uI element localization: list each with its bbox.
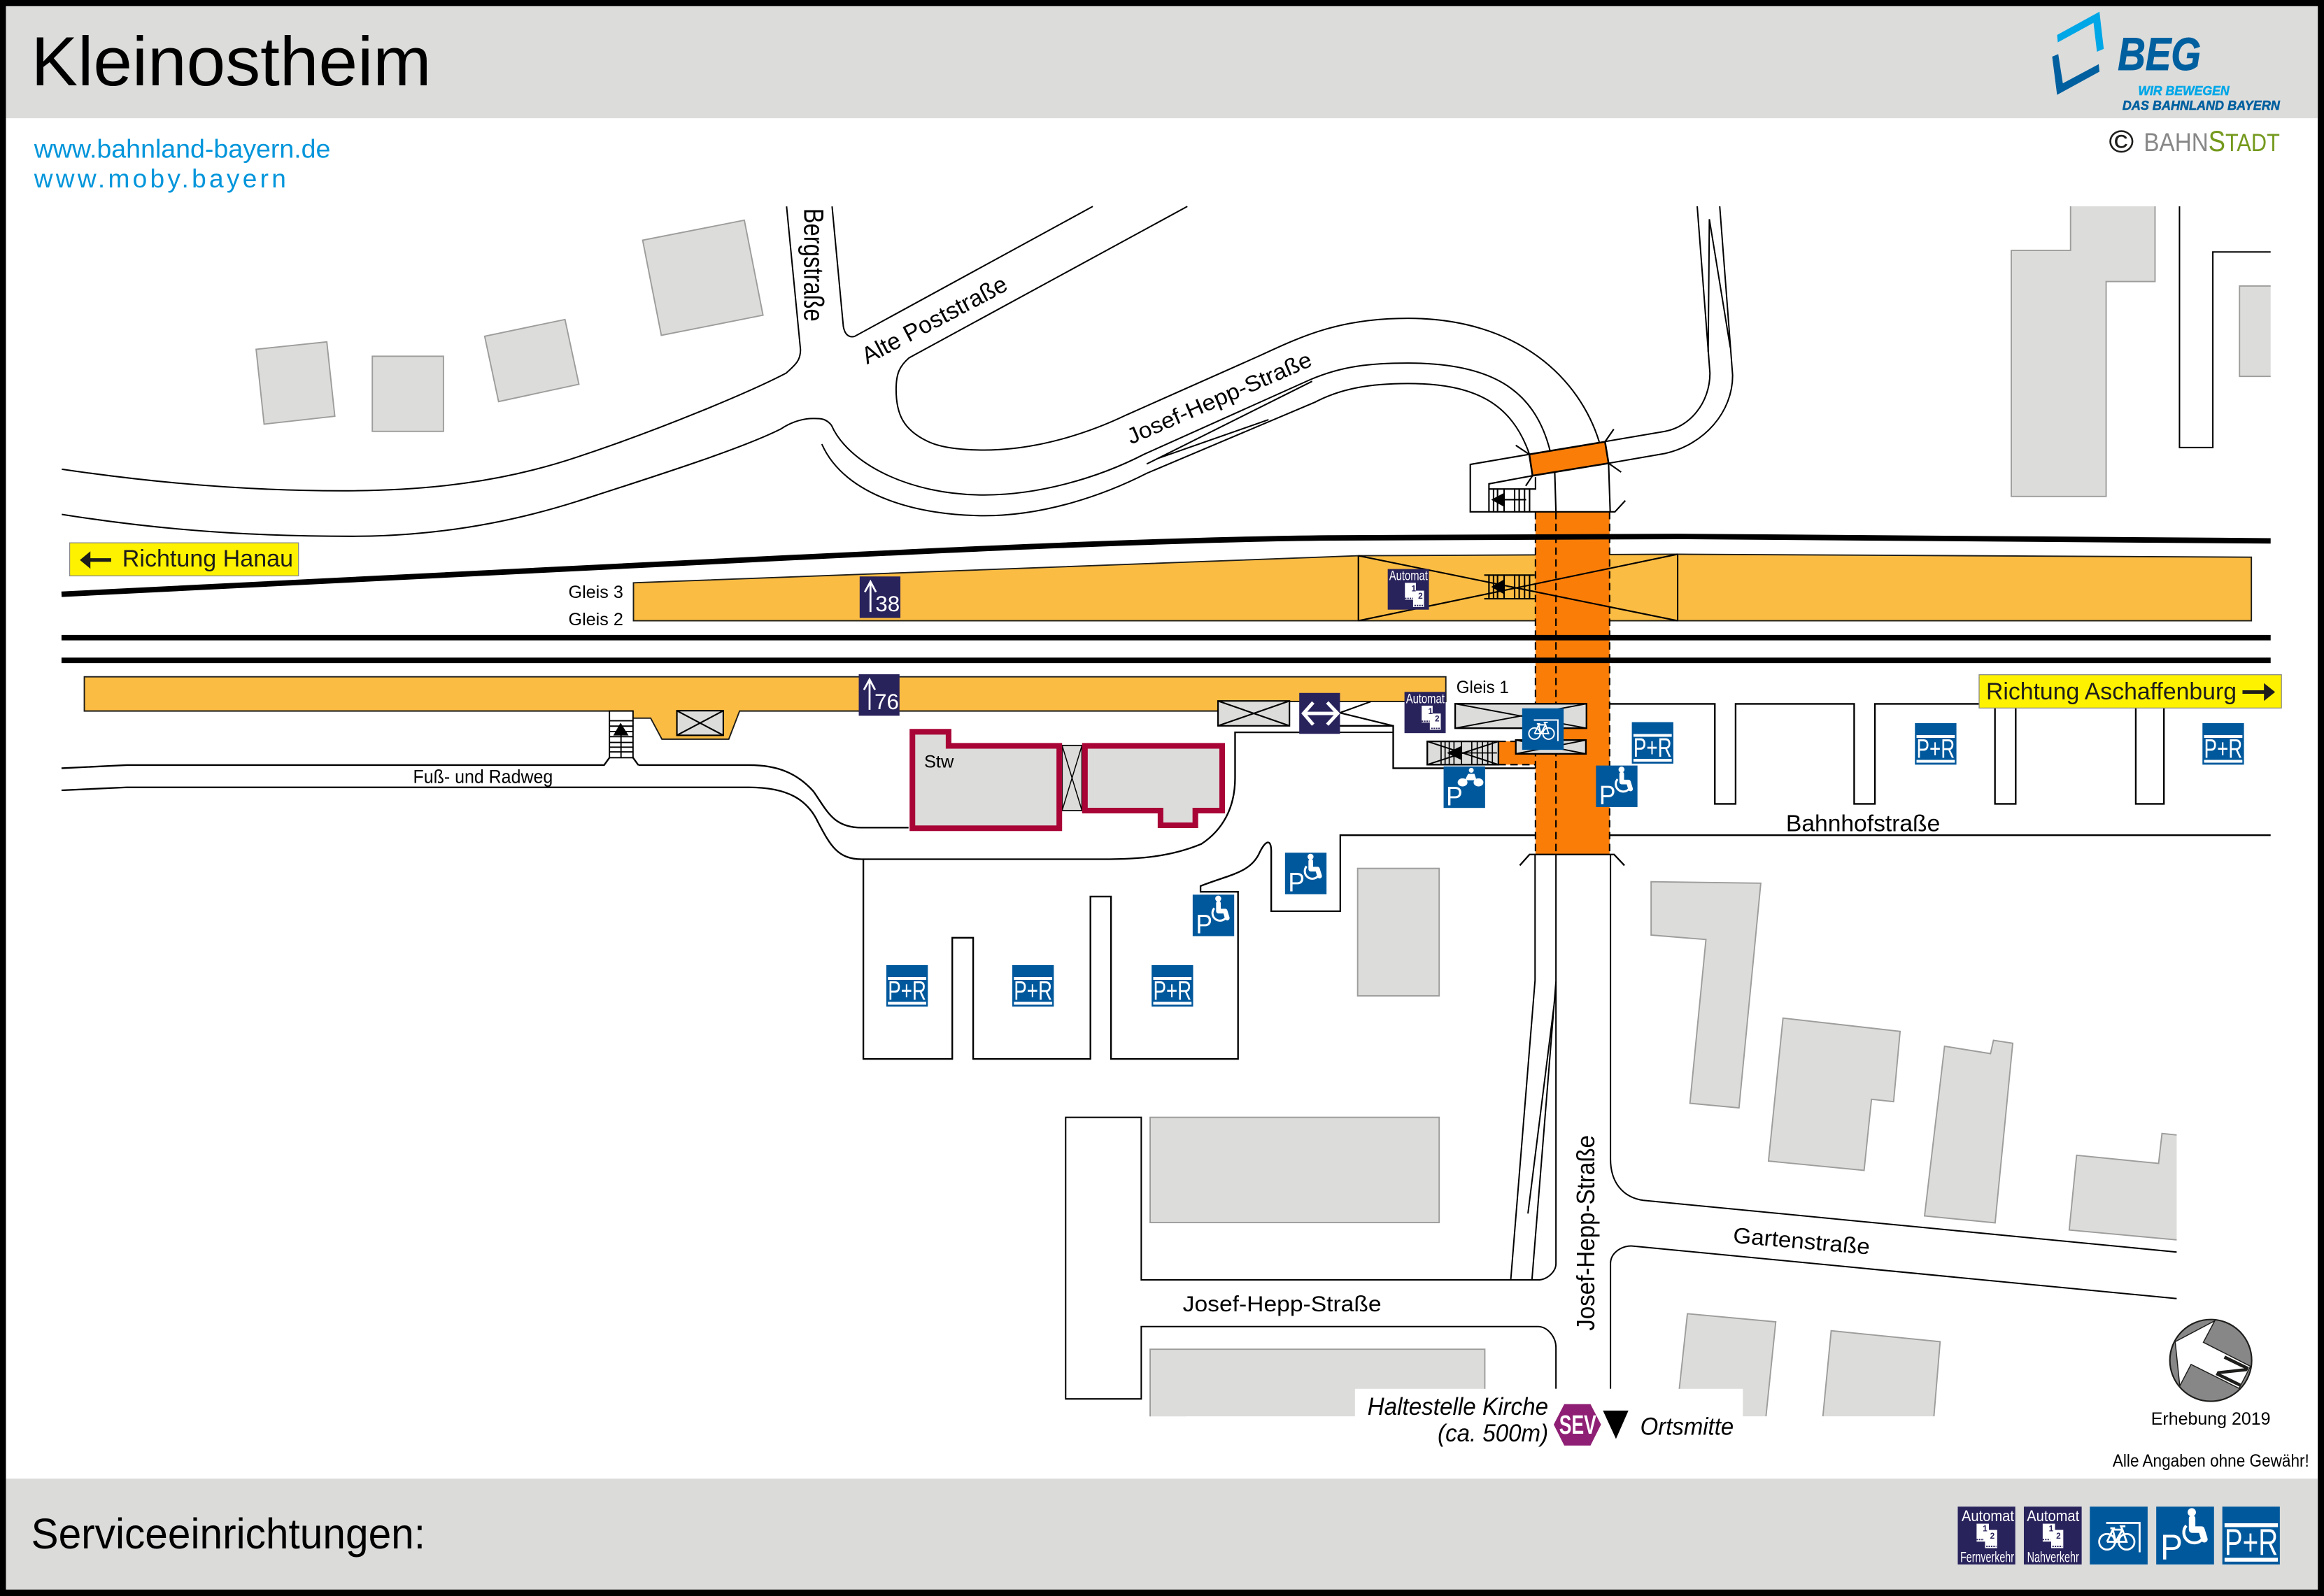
logo: BEG: [2052, 12, 2280, 113]
platform labels: Gleis 2: [568, 610, 623, 629]
website links: www.bahnland-bayern.de: [34, 134, 330, 164]
legend: Automat Fernverkehr: 2: [1990, 1531, 1995, 1541]
signal box: Stw: [912, 732, 1222, 828]
stairs: Gleis 2/3: [1485, 575, 1535, 599]
platform labels: [568, 583, 1509, 697]
copyright: BahnStadt: ©: [2109, 124, 2134, 159]
legend: Automat Nahverkehr: 2: [2056, 1531, 2061, 1541]
callout: Ortsmitte: Ortsmitte: [1641, 1413, 1734, 1440]
icon: ticket machine Gleis 2/3: 1: [1412, 583, 1417, 593]
shelter: Gleis 1: [1218, 701, 1394, 726]
icon: park and ride 1: P+R: [1634, 734, 1672, 763]
icon: platform length 76: 76: [874, 690, 899, 714]
direction sign: Hanau: Richtung Hanau: [122, 546, 293, 572]
icon: park and ride 1: [1632, 722, 1673, 764]
platform: Gleis 2/3: [633, 554, 2251, 621]
icon: accessible parking west: P: [1196, 911, 1212, 940]
legend: accessible parking: P: [2160, 1527, 2183, 1567]
road label: Bergstrasse: Bergstraße: [798, 208, 829, 322]
road label: Bahnhofstrasse: Bahnhofstraße: [1786, 811, 1940, 837]
legend: park and ride: P+R: [2225, 1522, 2278, 1563]
copyright: BahnStadt: BAHN: [2144, 127, 2209, 157]
legend: park and ride: [2223, 1506, 2280, 1565]
elevator and stairs area: Gleis 1 east: [1427, 704, 1587, 764]
icon: park and ride 2: P+R: [1917, 734, 1955, 764]
icon: platform length 38: 38: [875, 592, 900, 616]
footer heading: Serviceeinrichtungen:: [31, 1510, 425, 1558]
callout: SEV stop: [1368, 1393, 1601, 1447]
icon: park and ride 5: [1012, 965, 1054, 1006]
icon: park and ride 5: P+R: [1014, 976, 1052, 1006]
icon: accessible parking west: [1193, 895, 1234, 940]
icon: ticket machine Gleis 1: Automat: [1406, 692, 1445, 706]
roads: [62, 206, 2271, 1399]
direction sign: Hanau: [70, 543, 299, 576]
callout: SEV stop: (ca. 500m): [1438, 1420, 1548, 1447]
road label: Alte Poststrasse: Alte Poststraße: [857, 271, 1012, 369]
title: Kleinostheim: [31, 23, 432, 101]
icon: motorcycle parking: [1444, 767, 1485, 811]
icon: accessible parking at underpass: P: [1599, 781, 1615, 811]
legend: Automat Fernverkehr: Automat: [1962, 1507, 2015, 1525]
callout: SEV stop: SEV: [1559, 1410, 1596, 1440]
stairs: Fussweg: [609, 711, 633, 757]
copyright: BahnStadt: STADT: [2209, 125, 2280, 157]
website links: [34, 134, 330, 193]
legend: Automat Nahverkehr: Automat: [2027, 1507, 2080, 1525]
road label: Josef-Hepp-Strasse south: Josef-Hepp-Straße: [1183, 1291, 1382, 1316]
icon: bike parking: [1522, 708, 1564, 750]
icon: park and ride 6: P+R: [1153, 976, 1191, 1006]
icon: park and ride 4: [886, 965, 928, 1006]
road label: Gartenstrasse: Gartenstraße: [1732, 1223, 1871, 1260]
icon: platform length 38: [860, 576, 900, 618]
footer band: [6, 1479, 2318, 1590]
underpass dashed edges: [1498, 512, 1610, 855]
path label: Fuss- und Radweg: Fuß- und Radweg: [413, 766, 553, 787]
icon: park and ride 3: [2202, 723, 2244, 764]
icon: park and ride 3: P+R: [2204, 734, 2242, 764]
legend: accessible parking: [2156, 1506, 2214, 1567]
icon: ticket machine Gleis 1: [1405, 692, 1446, 733]
road label: Josef-Hepp-Strasse vertical: Josef-Hepp-Straße: [1571, 1135, 1600, 1331]
icon: accessible parking north: P: [1288, 869, 1305, 898]
icon: ticket machine Gleis 2/3: [1388, 569, 1429, 610]
platform labels: Gleis 1: [1457, 678, 1509, 697]
signal box: Stw: Stw: [924, 752, 954, 771]
platform: Gleis 1: [85, 677, 1446, 739]
website links: www.moby.bayern: [34, 164, 286, 193]
copyright: BahnStadt: [2109, 124, 2280, 159]
tracks: [62, 536, 2271, 660]
platform labels: Gleis 3: [568, 583, 623, 602]
bridge outline and stairs: [1471, 429, 1625, 512]
logo: BEG: WIR BEWEGEN: [2138, 83, 2230, 98]
callout: Ortsmitte: [1603, 1411, 1734, 1440]
legend: Automat Nahverkehr: [2024, 1506, 2082, 1565]
bridge deck: [1529, 442, 1608, 476]
icon: motorcycle parking: P: [1446, 782, 1463, 811]
icon: ticket machine Gleis 2/3: Automat: [1389, 569, 1428, 584]
legend: Automat Fernverkehr: Fernverkehr: [1960, 1549, 2014, 1565]
icon: ticket machine Gleis 1: 2: [1435, 714, 1440, 724]
north arrow: [2170, 1320, 2258, 1402]
icon: accessible parking north: [1285, 853, 1326, 898]
direction sign: Aschaffenburg: Richtung Aschaffenburg: [1986, 678, 2237, 705]
underpass south flares: [1519, 855, 1624, 865]
platform shelter: Gleis 2/3: [1359, 554, 1678, 621]
legend: Automat Fernverkehr: [1957, 1506, 2015, 1565]
header band: [6, 6, 2318, 118]
icon: platform transfer arrows: [1299, 693, 1340, 734]
white label backing: [1186, 1389, 1957, 1476]
icon: accessible parking at underpass: [1596, 766, 1638, 811]
road label: Josef-Hepp-Strasse north: Josef-Hepp-Straße: [1123, 347, 1315, 449]
logo: BEG: BEG: [2118, 29, 2201, 80]
callout: SEV stop: Haltestelle Kirche: [1368, 1393, 1548, 1420]
legend: Automat Nahverkehr: 1: [2049, 1524, 2054, 1534]
legend: Automat Fernverkehr: 1: [1983, 1524, 1988, 1534]
underpass: [1498, 512, 1610, 855]
logo: BEG: DAS BAHNLAND BAYERN: [2123, 98, 2280, 113]
survey year: Erhebung 2019: [2151, 1409, 2271, 1429]
elevator: Gleis 1 west: [677, 711, 723, 735]
icon: park and ride 4: P+R: [888, 976, 926, 1006]
icon: park and ride 6: [1152, 965, 1193, 1006]
icon: platform length 76: [859, 674, 900, 715]
legend: bike parking: [2090, 1506, 2148, 1565]
buildings: [256, 206, 2271, 1416]
icon: park and ride 2: [1915, 723, 1957, 764]
legend: Automat Nahverkehr: Nahverkehr: [2027, 1549, 2079, 1565]
icon: ticket machine Gleis 1: 1: [1429, 706, 1433, 716]
direction sign: Aschaffenburg: [1979, 675, 2281, 708]
icon: ticket machine Gleis 2/3: 2: [1418, 591, 1423, 601]
north arrow: N: [2206, 1349, 2258, 1393]
